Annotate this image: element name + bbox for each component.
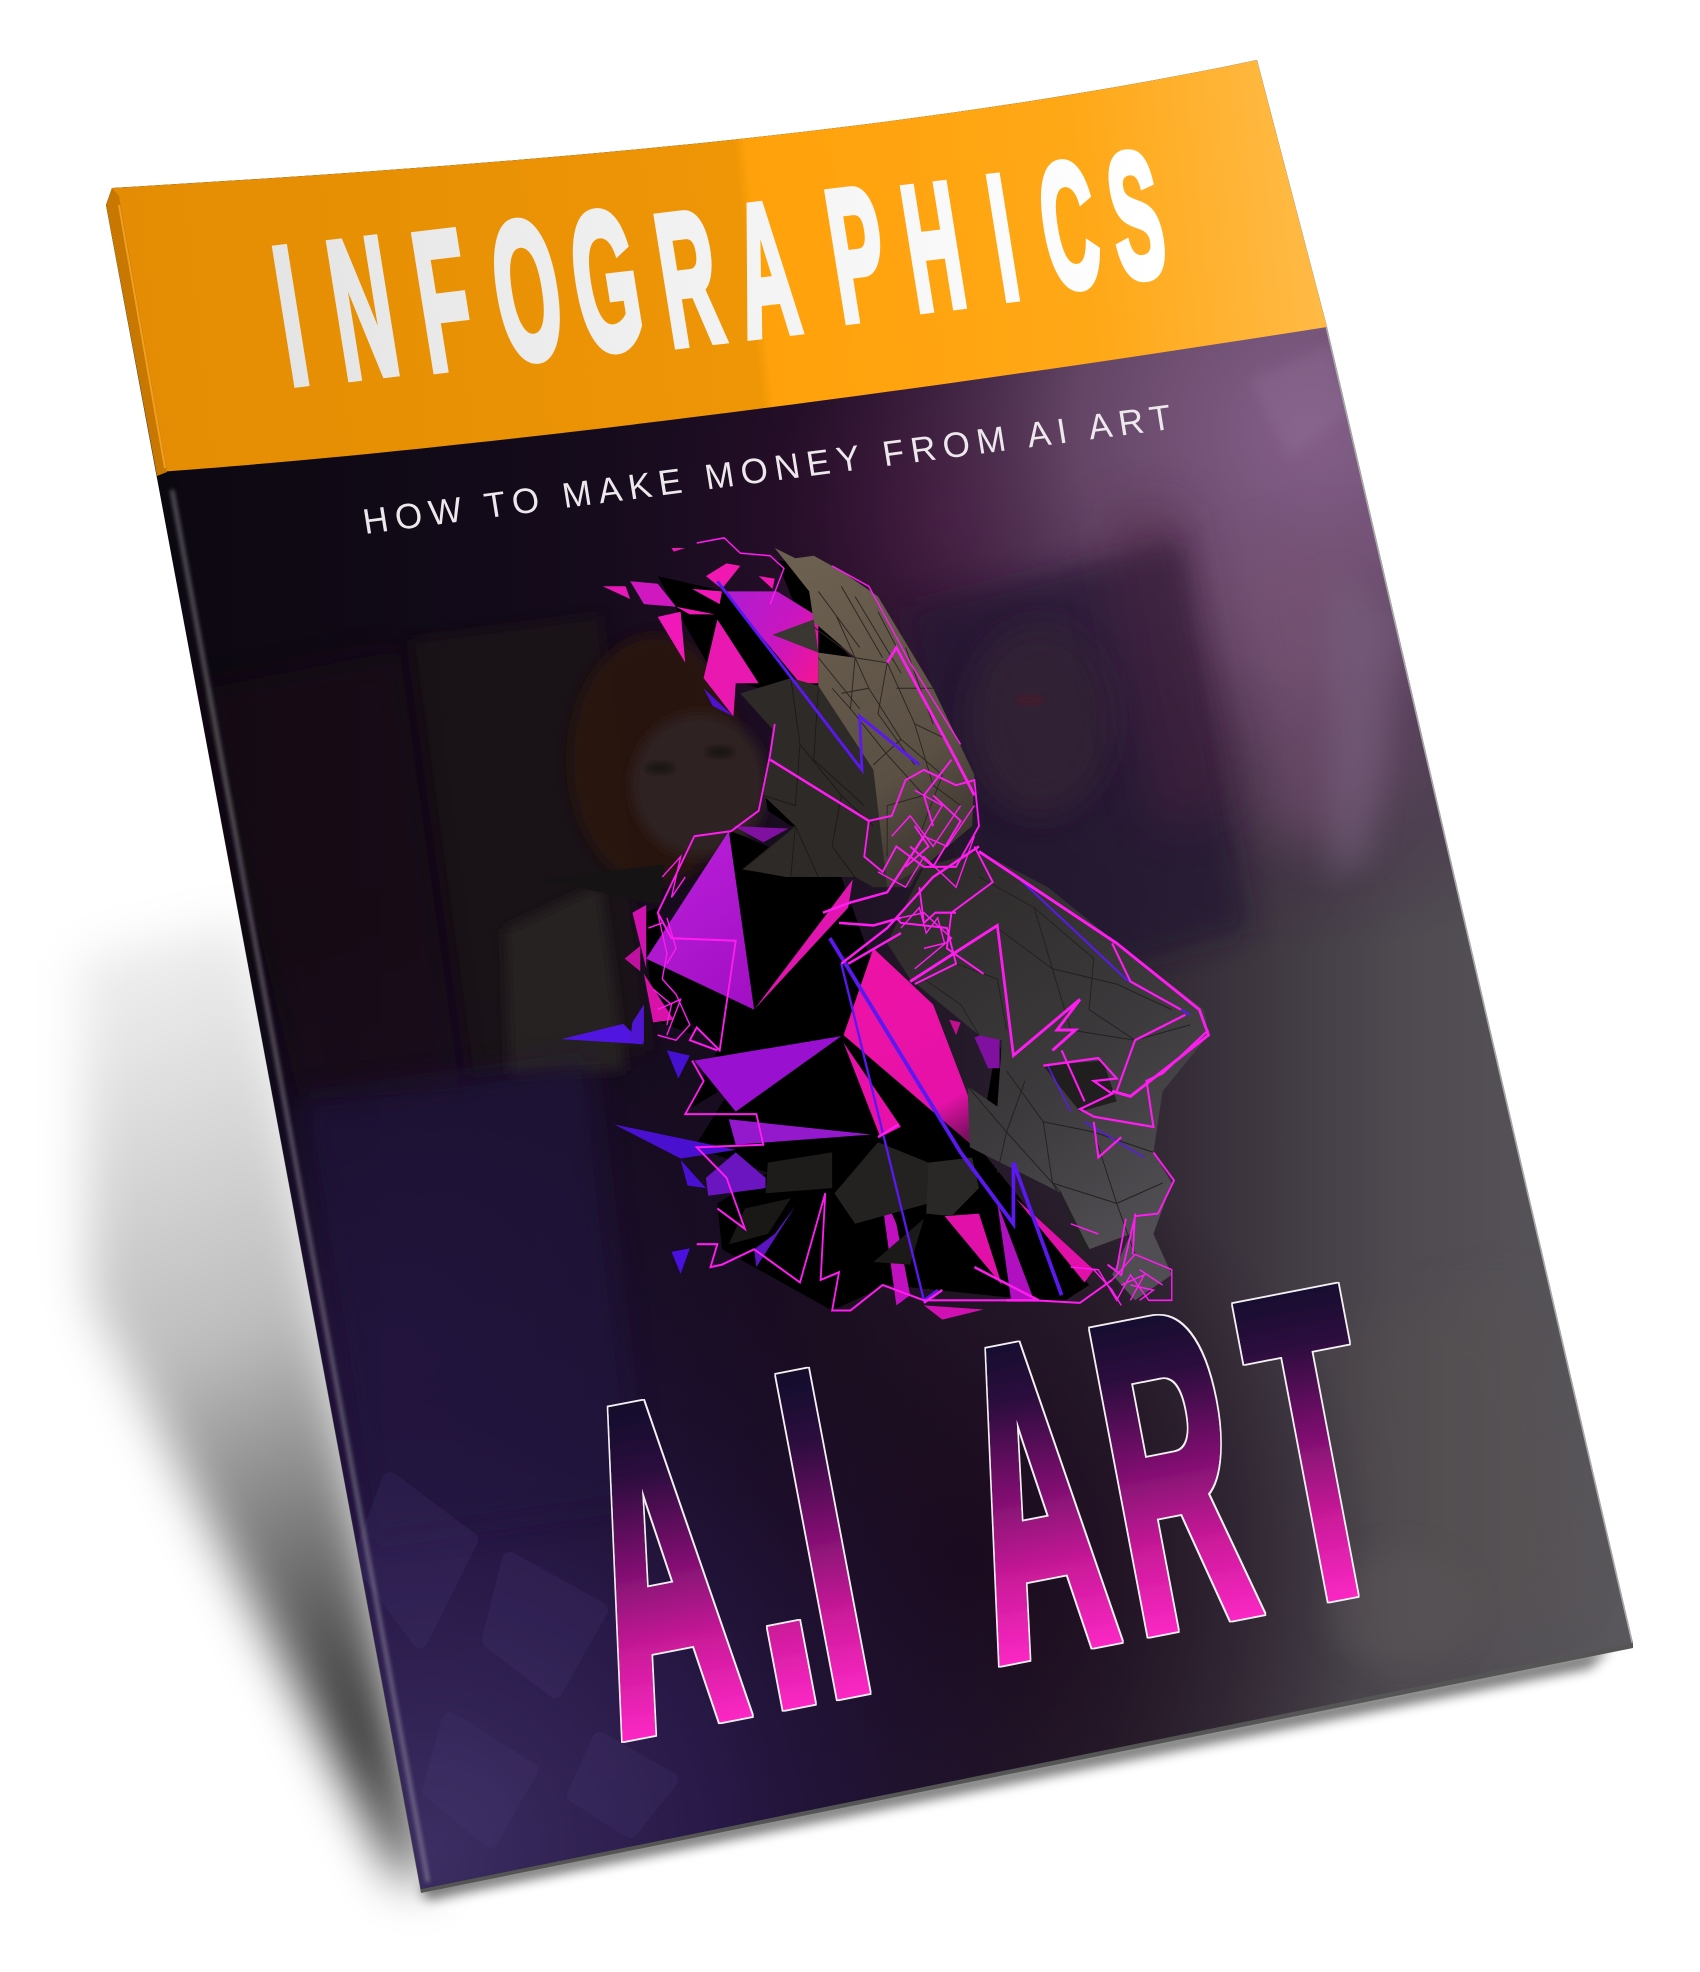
faded portrait: smiling woman bbox=[505, 635, 768, 1075]
main title: A.I ART: A.I bbox=[544, 1278, 895, 1829]
neon magenta wireframe bbox=[649, 538, 1208, 1310]
faded portrait: painted woman bbox=[905, 500, 1250, 1000]
faded figure in lilac bbox=[1250, 600, 1400, 875]
purple and blue facets bbox=[561, 826, 1000, 1274]
main title: A.I ART: T bbox=[1217, 1198, 1411, 1693]
spine highlight bbox=[172, 490, 428, 1882]
title: INFOGRAPHICS: INFOG bbox=[262, 166, 655, 430]
main title: A.I ART bbox=[544, 1177, 1412, 1829]
main title: A.I ART: AR bbox=[924, 1219, 1280, 1751]
dark grey mesh: neck and chest bbox=[541, 678, 933, 905]
black shard mass bbox=[644, 561, 1089, 1310]
right edge line bbox=[1327, 327, 1633, 1643]
low-poly figure illustration bbox=[541, 538, 1208, 1320]
subtitle: HOW TO MAKE MONEY FROM AI ART bbox=[360, 398, 1174, 542]
dark grey mesh: torso bbox=[729, 852, 1208, 1300]
dark grey mesh: hair bbox=[772, 548, 974, 887]
blue wire lines bbox=[717, 581, 1190, 1300]
title: INFOGRAPHICS bbox=[272, 149, 1165, 388]
soft cast shadow bbox=[80, 920, 1610, 1900]
faded photo collage bbox=[172, 345, 1580, 1882]
magenta facets bbox=[603, 548, 1094, 1320]
magazine edge thickness bbox=[106, 188, 1633, 1893]
title: INFOGRAPHICS: RAP bbox=[643, 147, 901, 386]
orange title band bbox=[106, 60, 1327, 476]
title: INFOGRAPHICS: HICS bbox=[890, 114, 1178, 348]
faded rounded tiles bbox=[360, 1480, 670, 1840]
band spine bbox=[106, 188, 167, 476]
